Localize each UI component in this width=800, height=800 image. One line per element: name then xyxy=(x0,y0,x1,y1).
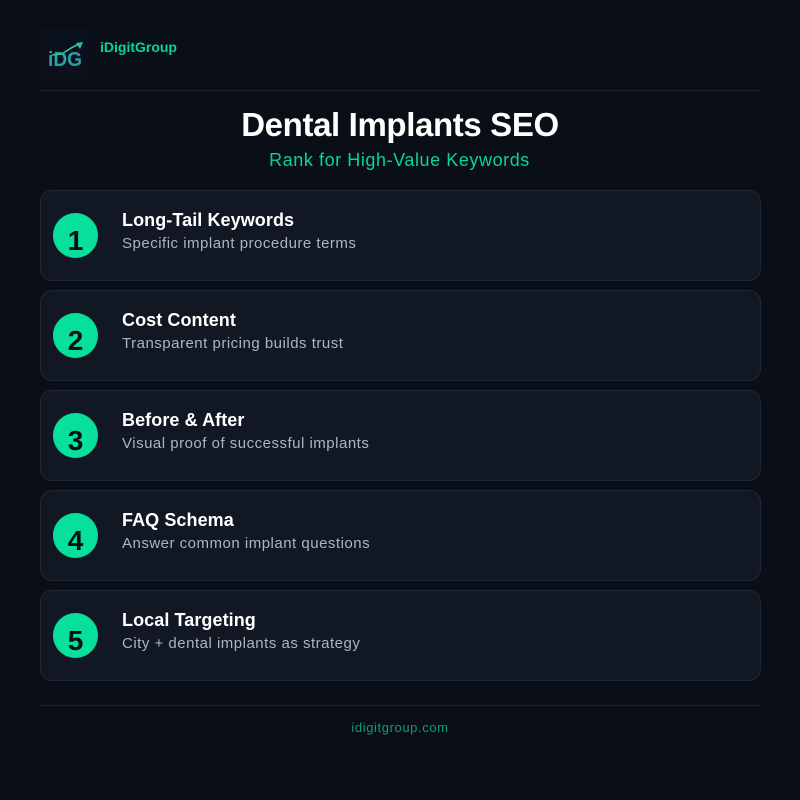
number 5 xyxy=(53,613,98,658)
number 1: 1 xyxy=(68,225,83,256)
number 1 xyxy=(53,213,98,258)
subtitle: Rank for High-Value Keywords xyxy=(269,150,530,170)
card 4 heading: FAQ Schema xyxy=(122,510,234,530)
card 2 description: Transparent pricing builds trust xyxy=(122,335,343,352)
card 4 description: Answer common implant questions xyxy=(122,535,370,552)
number 4: 4 xyxy=(68,525,83,556)
number 2 xyxy=(53,313,98,358)
number 5: 5 xyxy=(68,625,83,656)
title: Dental Implants SEO xyxy=(241,106,559,143)
number 3 xyxy=(53,413,98,458)
card 3: before and after xyxy=(40,390,761,481)
card 5: local targeting xyxy=(40,590,761,681)
card 1 description: Specific implant procedure terms xyxy=(122,235,356,252)
logo: iDG xyxy=(48,49,82,71)
card 5 heading: Local Targeting xyxy=(122,610,256,630)
card 3 description: Visual proof of successful implants xyxy=(122,435,369,452)
card 4: FAQ schema xyxy=(40,490,761,581)
number 2: 2 xyxy=(68,325,83,356)
card 2: cost content xyxy=(40,290,761,381)
card 2 heading: Cost Content xyxy=(122,310,236,330)
card 1 heading: Long-Tail Keywords xyxy=(122,210,294,230)
card 5 description: City + dental implants as strategy xyxy=(122,635,360,652)
footer url: idigitgroup.com xyxy=(351,720,449,735)
number 3: 3 xyxy=(68,425,83,456)
card 3 heading: Before & After xyxy=(122,410,244,430)
brand name: iDigitGroup xyxy=(100,39,177,55)
logo xyxy=(40,28,90,78)
card 1: long-tail keywords xyxy=(40,190,761,281)
number 4 xyxy=(53,513,98,558)
